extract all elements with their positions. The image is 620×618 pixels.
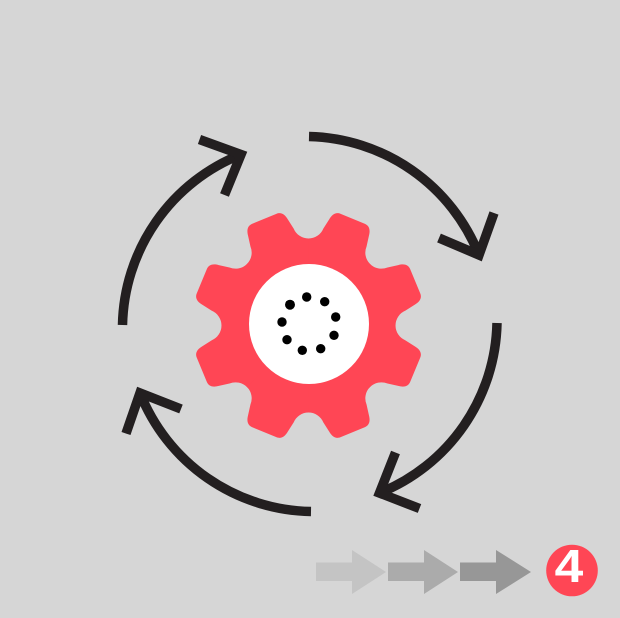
progress arrows xyxy=(316,550,531,594)
ring of black dots xyxy=(277,292,340,355)
arrow: top right xyxy=(309,136,494,255)
arrow: bottom left xyxy=(126,393,311,512)
icon: red gear xyxy=(189,206,428,445)
step number badge xyxy=(546,541,598,596)
arrow: dark grey xyxy=(460,550,531,594)
step number badge: 4 xyxy=(555,541,583,592)
arrow: light grey xyxy=(316,550,386,594)
arrow: bottom right xyxy=(380,323,497,508)
arrow: top left xyxy=(122,140,241,325)
arrow: medium grey xyxy=(388,550,458,594)
gear hub: white circle xyxy=(249,264,369,384)
cycle arrows xyxy=(122,136,497,512)
